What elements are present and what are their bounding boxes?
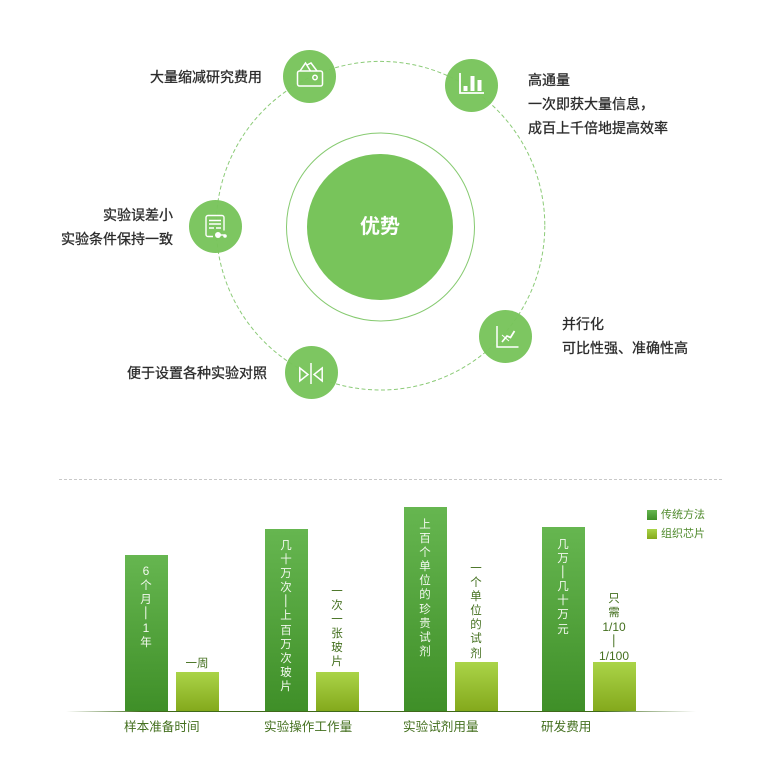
category labels — [124, 720, 352, 734]
value: hundreds of thousands of runs: 几 — [280, 540, 292, 552]
value: one tenth to one hundredth: 需 — [608, 607, 620, 619]
circular diagram: rings and icons — [189, 50, 546, 399]
label: small error: 实验条件保持一致 — [61, 231, 173, 247]
legend: traditional: 传统方法 — [661, 509, 705, 521]
value: tens of thousands — [554, 539, 572, 636]
value: one run, one slide: 玻 — [331, 642, 343, 654]
value: hundreds of thousands of runs: 次 — [280, 653, 292, 665]
icon: document with nodes — [189, 200, 242, 253]
value: tens of thousands: 万 — [557, 609, 569, 621]
legend: tissue chip: 组织芯片 — [661, 528, 705, 540]
value: tens of thousands: 几 — [557, 581, 569, 593]
bar group 4 — [542, 527, 636, 711]
value: hundreds of thousands of runs: 万 — [280, 568, 292, 580]
value: 6 months to 1 year: 月 — [140, 594, 152, 606]
value: tens of thousands: 几 — [557, 539, 569, 551]
center title: 优势 — [360, 216, 400, 238]
central circle — [307, 154, 453, 300]
label: parallel: 并行化 — [562, 316, 604, 332]
value: 6 months to 1 year: 6 — [143, 564, 149, 578]
value: one run, one slide — [331, 586, 343, 668]
bar: traditional — [542, 527, 585, 711]
category 1: 样本准备时间 — [124, 720, 200, 734]
value: one tenth to one hundredth: 只 — [608, 593, 620, 605]
bar: traditional — [125, 555, 168, 711]
value: hundreds of units: 位 — [419, 575, 431, 587]
value: hundreds of units: 珍 — [419, 604, 431, 616]
value: hundreds of units: 贵 — [419, 618, 431, 630]
value: one run, one slide: 一 — [331, 586, 343, 598]
label: small error — [61, 207, 173, 247]
category 4: 研发费用 — [541, 720, 591, 734]
bar: traditional — [404, 507, 447, 711]
value: hundreds of thousands of runs — [277, 540, 295, 693]
value: one unit: 剂 — [470, 648, 482, 660]
icon: symmetric triangles — [285, 346, 338, 399]
value: hundreds of thousands of runs: 百 — [280, 625, 292, 637]
value: tens of thousands: 万 — [557, 553, 569, 565]
icon: wallet — [283, 50, 336, 103]
value: one unit: 一 — [470, 563, 482, 575]
value: one tenth to one hundredth — [599, 593, 629, 663]
label: small error: 实验误差小 — [103, 207, 173, 223]
value: one unit: 个 — [470, 577, 482, 589]
value: hundreds of thousands of runs: 十 — [280, 554, 292, 566]
value: hundreds of units: 百 — [419, 533, 431, 545]
label: high throughput — [528, 72, 668, 136]
value: one unit: 的 — [470, 619, 482, 631]
category 2: 实验操作工作量 — [264, 720, 352, 734]
bar: traditional — [265, 529, 308, 711]
value: hundreds of thousands of runs: 上 — [280, 610, 292, 622]
label: high throughput: 高通量 — [528, 72, 570, 88]
value: one tenth to one hundredth: 1/10 — [602, 620, 626, 634]
value: hundreds of units: 单 — [419, 561, 431, 573]
value: hundreds of units: 上 — [419, 519, 431, 531]
icon: trend chart — [479, 310, 532, 363]
value: hundreds of thousands of runs: 次 — [280, 582, 292, 594]
legend — [647, 508, 705, 540]
label: controls: 便于设置各种实验对照 — [127, 365, 267, 381]
value: 6 months to 1 year: ｜ — [137, 608, 155, 621]
bar: chip — [455, 662, 498, 711]
value: hundreds of units: 的 — [419, 589, 431, 601]
bar: chip — [593, 662, 636, 711]
bar group 3 — [404, 507, 498, 711]
value: hundreds of units: 剂 — [419, 646, 431, 658]
baseline — [66, 711, 696, 712]
value: tens of thousands: ｜ — [554, 567, 572, 580]
value: one run, one slide: 一 — [331, 614, 343, 626]
category labels — [403, 720, 591, 734]
value: hundreds of units — [419, 518, 431, 658]
bar group 1 — [125, 555, 219, 711]
value: one unit — [470, 563, 482, 660]
label: high throughput: 一次即获大量信息， — [528, 96, 654, 112]
dashed orbit ring — [216, 61, 545, 390]
value: one run, one slide: 片 — [331, 656, 343, 668]
thin inner ring — [286, 133, 474, 321]
value: tens of thousands: 十 — [557, 595, 569, 607]
value: 6 months to 1 year: 年 — [140, 637, 152, 649]
value: hundreds of thousands of runs: 万 — [280, 639, 292, 651]
value: tens of thousands: 元 — [557, 624, 569, 636]
value: one tenth to one hundredth: 1/100 — [599, 649, 629, 663]
value: one week: 一周 — [186, 658, 208, 670]
label: parallel: 可比性强、准确性高 — [562, 340, 688, 356]
value: 6 months to 1 year — [137, 564, 155, 649]
label: cost: 大量缩减研究费用 — [150, 69, 262, 85]
value: one unit: 试 — [470, 633, 482, 645]
value: hundreds of units: 个 — [419, 547, 431, 559]
value: hundreds of units: 试 — [419, 632, 431, 644]
label: high throughput: 成百上千倍地提高效率 — [528, 120, 668, 136]
bar: chip — [176, 672, 219, 711]
label: parallel — [562, 316, 688, 356]
bar group 2 — [265, 529, 359, 711]
value: one unit: 位 — [470, 605, 482, 617]
value: one run, one slide: 次 — [331, 600, 343, 612]
value: hundreds of thousands of runs: 玻 — [280, 667, 292, 679]
divider — [59, 479, 722, 480]
category 3: 实验试剂用量 — [403, 720, 479, 734]
value: 6 months to 1 year: 1 — [143, 621, 149, 635]
bar: chip — [316, 672, 359, 711]
value: hundreds of thousands of runs: 片 — [280, 681, 292, 693]
value: hundreds of thousands of runs: ｜ — [277, 596, 295, 609]
value: one unit: 单 — [470, 591, 482, 603]
value: 6 months to 1 year: 个 — [140, 580, 152, 592]
value: one run, one slide: 张 — [331, 628, 343, 640]
value: one tenth to one hundredth: ｜ — [605, 636, 623, 649]
icon: bar chart — [445, 59, 498, 112]
